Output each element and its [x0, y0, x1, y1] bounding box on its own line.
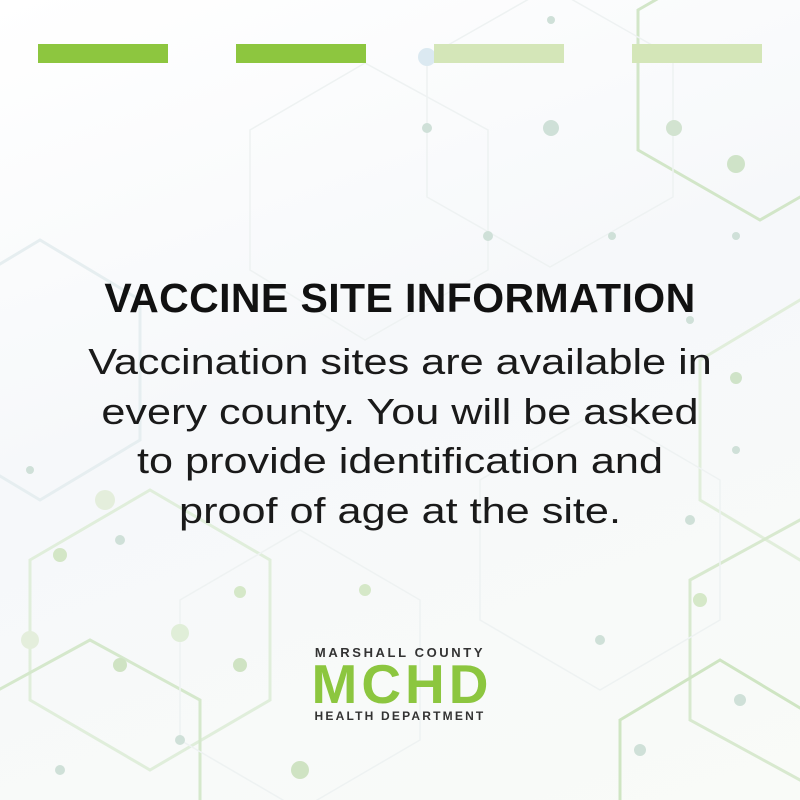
logo bottom text: HEALTH DEPARTMENT — [315, 709, 485, 723]
top bar 2 — [236, 44, 366, 63]
top bar 4 — [632, 44, 762, 63]
logo letters: MCHD — [312, 653, 492, 715]
title: VACCINE SITE INFORMATION — [104, 275, 696, 321]
logo: MCHD — [312, 645, 492, 723]
body text: to provide identification and — [137, 440, 663, 481]
body text: Vaccination sites are available in — [88, 341, 712, 382]
body text: every county. You will be asked — [101, 390, 699, 432]
body text: proof of age at the site. — [179, 490, 621, 530]
body text — [88, 341, 712, 530]
top bar 1 — [38, 44, 168, 63]
logo top text: MARSHALL COUNTY — [315, 645, 485, 660]
top bar 3 — [434, 44, 564, 63]
